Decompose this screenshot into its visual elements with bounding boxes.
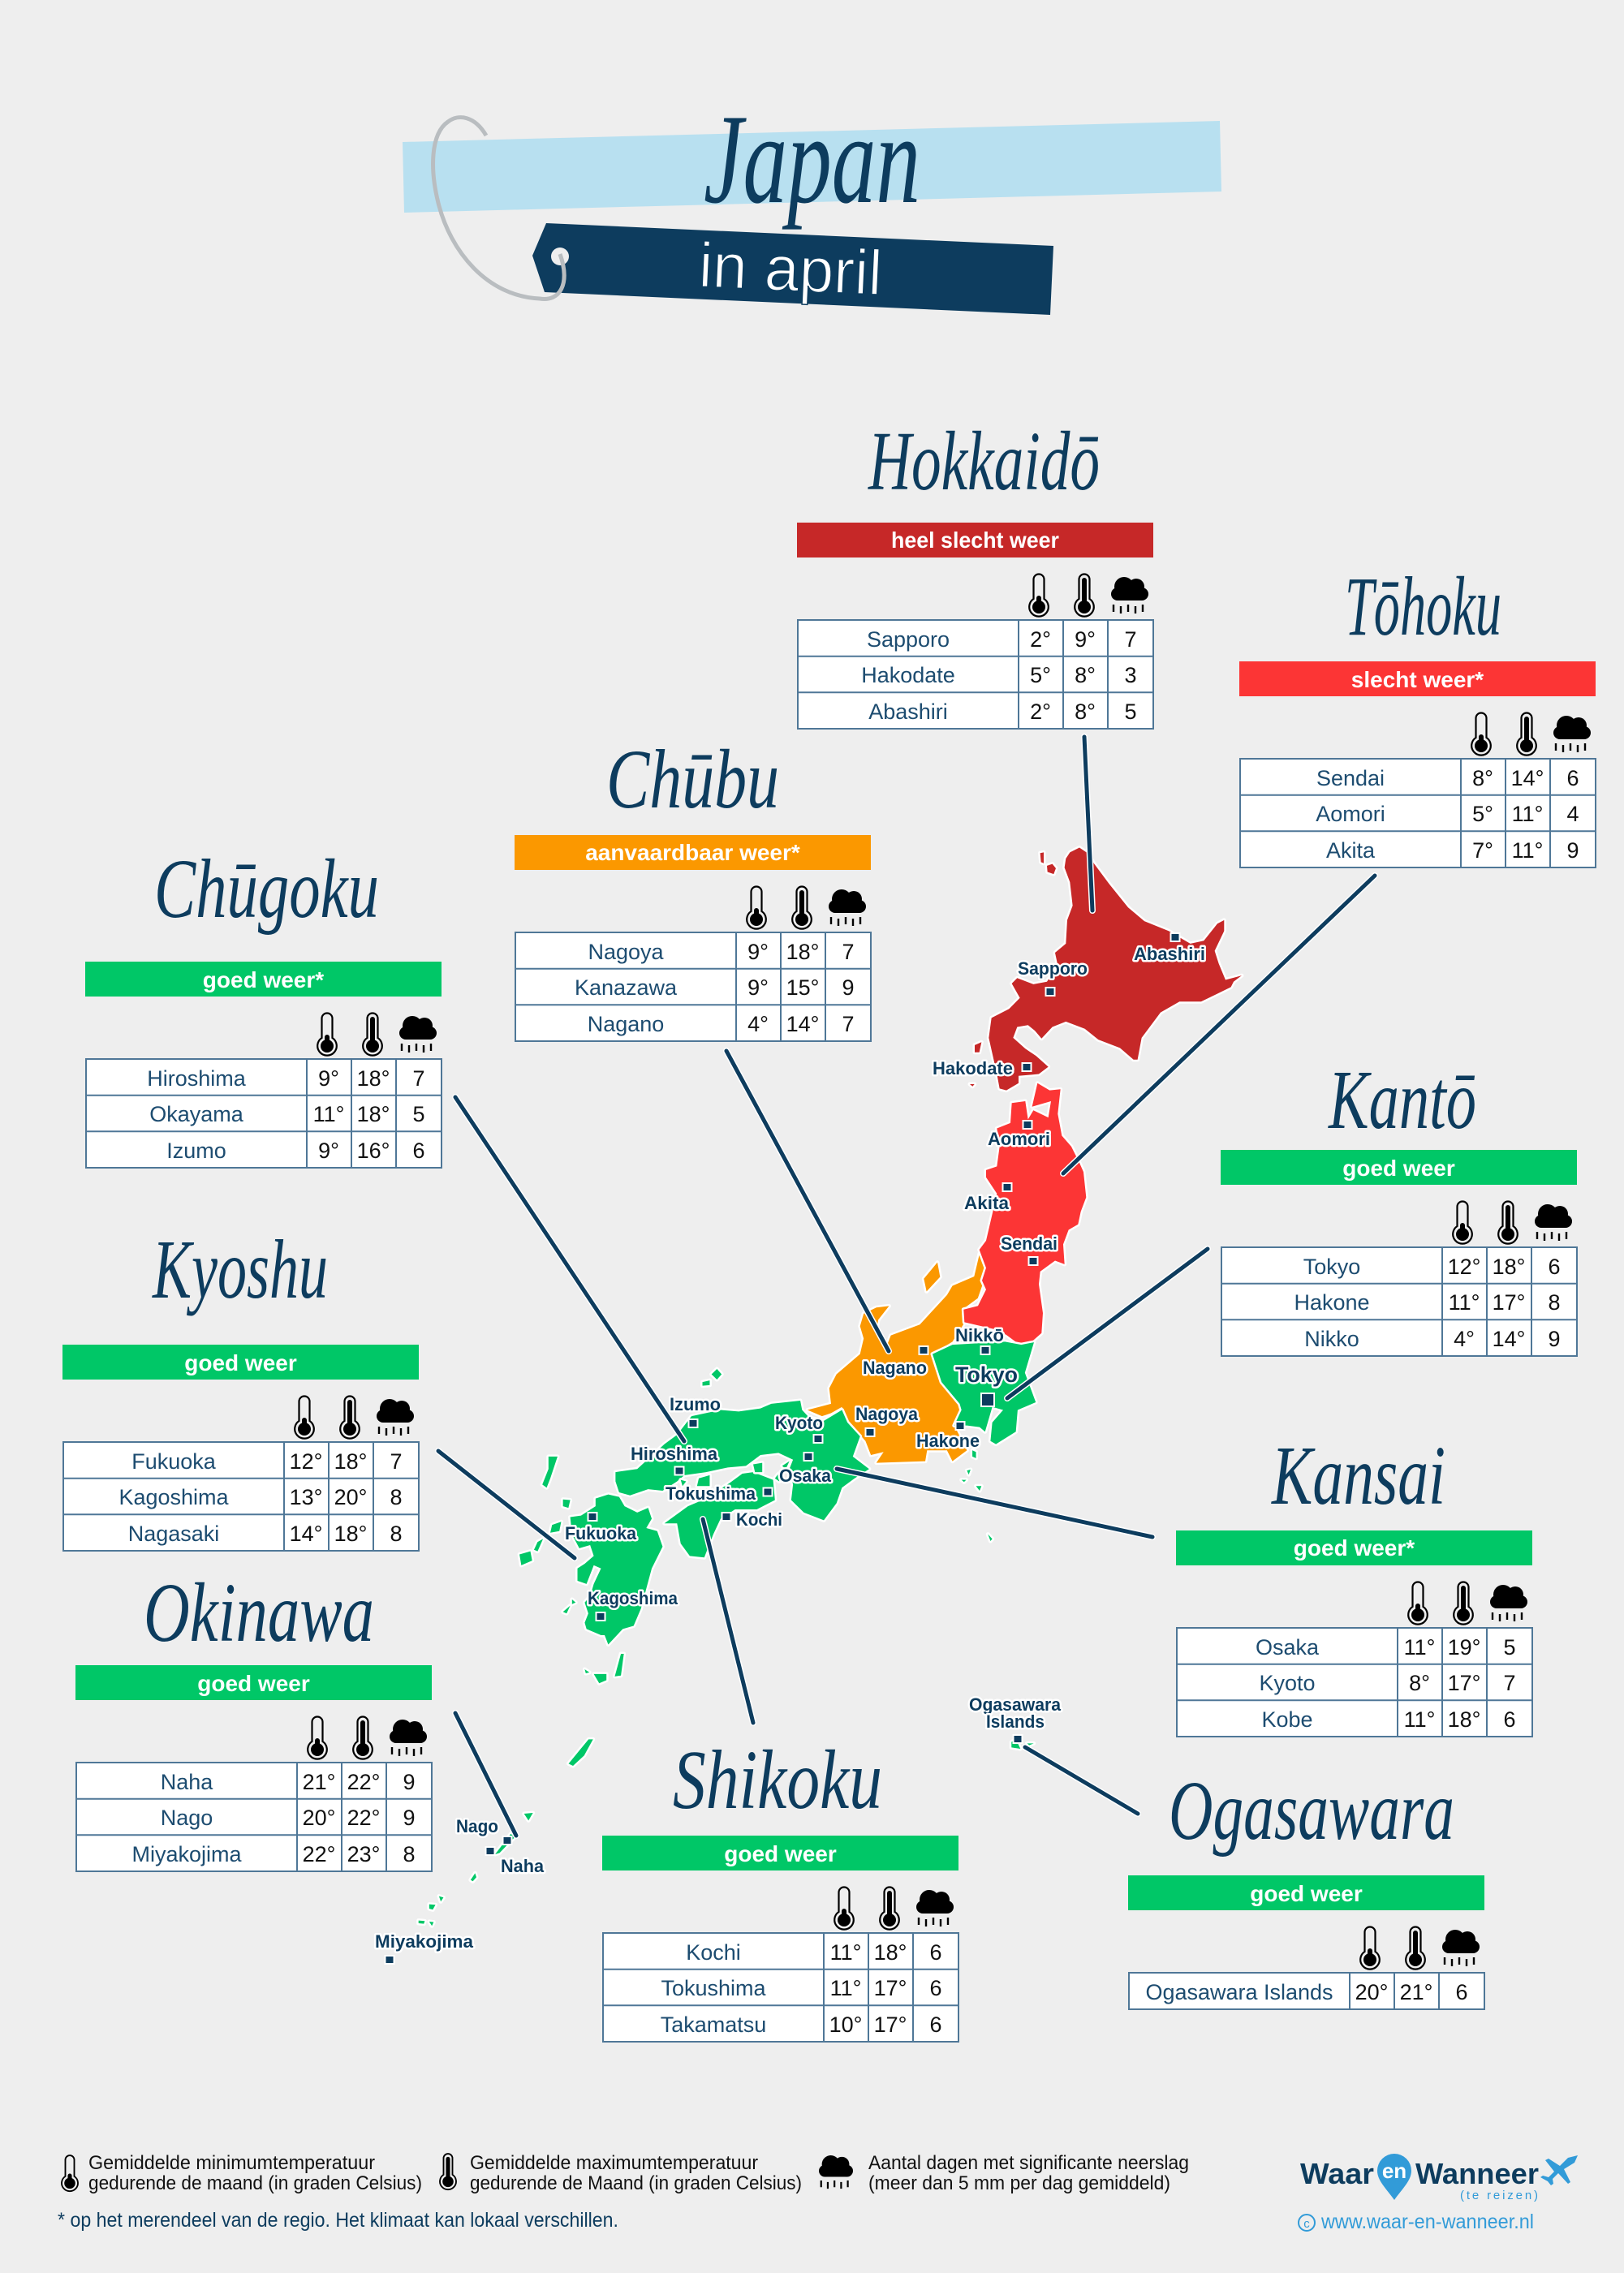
- icon: maximum temperature: [1454, 1582, 1473, 1625]
- table: 23°: [347, 1842, 380, 1866]
- icon: maximum temperature: [340, 1396, 360, 1439]
- table: [1177, 1628, 1532, 1737]
- table: 9°: [318, 1139, 339, 1163]
- city labels: Fukuoka: [565, 1523, 637, 1543]
- website: www.waar-en-wanneer.nl: [1320, 2211, 1534, 2233]
- table: Hakodate: [861, 663, 955, 687]
- table: 6: [1455, 1980, 1468, 2004]
- city labels: Kochi: [736, 1509, 782, 1530]
- rating bar: goed weer*: [203, 967, 324, 992]
- icon: legend minimum temperature: [62, 2155, 78, 2191]
- table: 17°: [874, 2013, 907, 2037]
- table: 17°: [1493, 1290, 1525, 1315]
- table: 18°: [334, 1522, 367, 1546]
- table: [1240, 759, 1596, 867]
- table: 8°: [1075, 700, 1096, 724]
- city labels: Hiroshima: [631, 1444, 718, 1464]
- rating bar: slecht weer*: [1351, 667, 1484, 692]
- table: 7: [390, 1449, 403, 1474]
- rating bar: [602, 1836, 958, 1870]
- table: 9°: [747, 975, 769, 1000]
- table: [63, 1442, 419, 1551]
- icon: maximum temperature: [1075, 575, 1094, 617]
- table: 8: [1548, 1290, 1561, 1315]
- city labels: [375, 944, 1205, 1952]
- table: 7: [412, 1066, 425, 1091]
- title tag: [532, 223, 1053, 315]
- table: 6: [929, 1940, 942, 1965]
- table: Tokushima: [661, 1976, 767, 2000]
- table: 17°: [874, 1976, 907, 2000]
- icon: rain: [829, 889, 866, 926]
- table: 15°: [786, 975, 819, 1000]
- region map: Hokkaido: [970, 848, 1242, 1091]
- table: 18°: [357, 1066, 390, 1091]
- rating bar: heel slecht weer: [891, 527, 1059, 553]
- title ribbon: [403, 121, 1221, 213]
- city labels: Izumo: [670, 1394, 721, 1414]
- leader: Kanto: [1007, 1249, 1208, 1398]
- table: 8°: [1075, 663, 1096, 687]
- panel: Kansai: [1176, 1429, 1532, 1737]
- icon: maximum temperature: [363, 1013, 382, 1056]
- table: 9°: [318, 1066, 339, 1091]
- heading: Hokkaido: Hokkaidō: [868, 415, 1100, 508]
- table: 18°: [1448, 1707, 1480, 1732]
- table: Okayama: [149, 1102, 244, 1126]
- table: Nago: [161, 1806, 213, 1830]
- icon: rain: [916, 1890, 954, 1926]
- icon: minimum temperature: [834, 1888, 854, 1930]
- city labels: Kagoshima: [588, 1588, 678, 1608]
- city labels: Hakone: [916, 1431, 980, 1451]
- rating bar: goed weer: [197, 1671, 310, 1696]
- table: [76, 1763, 432, 1871]
- city labels: Nagano: [863, 1358, 927, 1378]
- icon: minimum temperature: [317, 1013, 337, 1056]
- city labels: Islands: [986, 1711, 1045, 1732]
- table: 4°: [747, 1012, 769, 1036]
- table: 4: [1566, 802, 1579, 826]
- subtitle: in april: in april: [697, 229, 884, 308]
- city labels: Miyakojima: [375, 1931, 474, 1952]
- table: Kyoto: [1259, 1671, 1316, 1695]
- icon: rain: [377, 1399, 414, 1436]
- table: Izumo: [166, 1139, 226, 1163]
- icon: maximum temperature: [353, 1717, 373, 1759]
- table: Fukuoka: [131, 1449, 217, 1474]
- table: 9: [403, 1806, 416, 1830]
- table: Abashiri: [868, 700, 948, 724]
- table: 5°: [1472, 802, 1493, 826]
- table: 6: [412, 1139, 425, 1163]
- leader: Tohoku: [1063, 876, 1375, 1173]
- table: 14°: [786, 1012, 819, 1036]
- city labels: Tokushima: [666, 1483, 756, 1504]
- panel: Okinawa: [75, 1566, 432, 1871]
- city labels: Sapporo: [1018, 958, 1088, 979]
- rating bar: [515, 835, 871, 870]
- table: Kochi: [686, 1940, 741, 1965]
- table: Kobe: [1261, 1707, 1313, 1732]
- table: 11°: [830, 1976, 861, 2000]
- panel: Chugoku: [85, 842, 442, 1168]
- icon: maximum temperature: [792, 886, 812, 929]
- tag hole: [551, 248, 569, 265]
- legend text: rain: [868, 2152, 1189, 2194]
- table: 16°: [357, 1139, 390, 1163]
- table: 4°: [1454, 1327, 1475, 1351]
- leader: Kyushu: [438, 1451, 575, 1558]
- table: [798, 620, 1153, 729]
- city labels: Osaka: [779, 1466, 832, 1486]
- city labels: Aomori: [988, 1129, 1050, 1149]
- leader: Okinawa: [455, 1713, 516, 1836]
- icon: rain: [390, 1720, 427, 1756]
- icon: rain: [1490, 1585, 1527, 1621]
- table: 8°: [1472, 766, 1493, 790]
- table: 8°: [1409, 1671, 1430, 1695]
- table: Hiroshima: [147, 1066, 247, 1091]
- panel: Shikoku: [602, 1733, 958, 2042]
- leader: Chugoku: [455, 1097, 684, 1441]
- table: 9: [403, 1770, 416, 1794]
- icon: rain: [1111, 577, 1148, 613]
- rating bar: [85, 962, 442, 997]
- table: 14°: [290, 1522, 322, 1546]
- icon: rain: [1442, 1930, 1480, 1966]
- city labels: Nago: [456, 1816, 498, 1836]
- table: [515, 932, 871, 1041]
- icon: minimum temperature: [1471, 712, 1491, 756]
- icon: minimum temperature: [1408, 1582, 1428, 1625]
- city labels: Ogasawara: [969, 1694, 1062, 1715]
- city labels: Kyoto: [775, 1413, 823, 1433]
- table: 18°: [1493, 1255, 1525, 1279]
- logo: Waar en Wanneer: [1299, 2154, 1578, 2233]
- icon: minimum temperature: [308, 1717, 327, 1759]
- table: Hakone: [1294, 1290, 1370, 1315]
- region map: Tohoku: [963, 1083, 1086, 1344]
- table: 11°: [1512, 838, 1543, 863]
- leader lines: [438, 737, 1375, 1836]
- table: 11°: [1512, 802, 1543, 826]
- table: Aomori: [1316, 802, 1385, 826]
- table: Tokyo: [1303, 1255, 1360, 1279]
- leader: Kansai: [837, 1469, 1152, 1537]
- table: 9: [842, 975, 855, 1000]
- logo pin text: en: [1382, 2159, 1406, 2183]
- rating bar: [1128, 1875, 1484, 1910]
- icon: legend maximum temperature: [440, 2154, 456, 2189]
- icon: minimum temperature: [1360, 1926, 1380, 1970]
- heading: Kansai: Kansai: [1271, 1429, 1445, 1522]
- legend text: rain: Aantal dagen met significante neerslag: [868, 2152, 1189, 2174]
- table: Kagoshima: [118, 1485, 230, 1509]
- table: 5: [1124, 700, 1137, 724]
- table: 21°: [303, 1770, 335, 1794]
- icon: rain: [1535, 1204, 1572, 1241]
- rating bar: goed weer: [1342, 1156, 1455, 1181]
- icon: maximum temperature: [1517, 712, 1536, 756]
- table: Osaka: [1256, 1635, 1320, 1660]
- table: 8: [390, 1522, 403, 1546]
- table: Nagasaki: [128, 1522, 219, 1546]
- heading: Ogasawara: Ogasawara: [1169, 1764, 1454, 1858]
- table: 7: [1503, 1671, 1516, 1695]
- rating bar: goed weer*: [1294, 1535, 1415, 1561]
- table: 11°: [1404, 1635, 1435, 1660]
- icon: minimum temperature: [747, 886, 766, 929]
- table: 5: [412, 1102, 425, 1126]
- table: Takamatsu: [661, 2013, 766, 2037]
- rating bar: [797, 523, 1153, 557]
- table: Kanazawa: [575, 975, 678, 1000]
- region map: Kanto, Kansai, Chugoku, Shikoku and Kyushu: [519, 1341, 1036, 1683]
- table: 6: [929, 2013, 942, 2037]
- copyright mark: [1299, 2215, 1315, 2231]
- logo subtitle: (te reizen): [1460, 2189, 1538, 2202]
- city labels: Abashiri: [1134, 944, 1205, 964]
- table: 22°: [347, 1770, 380, 1794]
- table: 22°: [347, 1806, 380, 1830]
- table: 18°: [334, 1449, 367, 1474]
- table: Sapporo: [867, 627, 950, 652]
- city markers: [385, 933, 1180, 1964]
- table: Naha: [161, 1770, 213, 1794]
- table: 18°: [357, 1102, 390, 1126]
- rating bar: [1221, 1150, 1577, 1185]
- table: 2°: [1030, 627, 1051, 652]
- heading: Chugoku: Chūgoku: [154, 842, 379, 936]
- panel: Hokkaido: [797, 415, 1153, 729]
- table: Ogasawara Islands: [1145, 1980, 1333, 2004]
- tag string: [433, 118, 564, 299]
- legend text: minimum temperature: gedurende de maand (in graden Celsius): [88, 2172, 422, 2194]
- table: 17°: [1448, 1671, 1480, 1695]
- table: 9: [1566, 838, 1579, 863]
- table: [86, 1059, 442, 1168]
- table: 11°: [313, 1102, 344, 1126]
- table: Akita: [1326, 838, 1376, 863]
- heading: Okinawa: Okinawa: [144, 1566, 374, 1660]
- rating bar: goed weer: [184, 1350, 297, 1375]
- title: Japan: Japan: [704, 88, 920, 230]
- legend text: minimum temperature: Gemiddelde minimumtemperatuur: [88, 2152, 375, 2174]
- city labels: Nagoya: [855, 1404, 919, 1424]
- table: 6: [1503, 1707, 1516, 1732]
- heading: Kanto: Kantō: [1328, 1053, 1476, 1147]
- panel: Kanto: [1221, 1053, 1577, 1356]
- logo text: Waar: Waar: [1300, 2157, 1374, 2190]
- table: 9°: [1075, 627, 1096, 652]
- table: Nagano: [588, 1012, 664, 1036]
- table: 12°: [1448, 1255, 1480, 1279]
- table: 6: [929, 1976, 942, 2000]
- city labels: Nikkō: [955, 1325, 1004, 1345]
- heading: Kyushu: Kyoshu: [152, 1223, 328, 1316]
- table: 8: [403, 1842, 416, 1866]
- icon: maximum temperature: [1498, 1201, 1518, 1244]
- leader: Shikoku: [703, 1519, 753, 1723]
- icon: maximum temperature: [1406, 1926, 1425, 1970]
- rating bar: [62, 1345, 419, 1380]
- table: 18°: [786, 940, 819, 964]
- legend text: maximum temperature: gedurende de Maand (in graden Celsius): [470, 2172, 802, 2194]
- table: [1129, 1973, 1484, 2009]
- rating bar: goed weer: [1250, 1881, 1363, 1906]
- table: 14°: [1493, 1327, 1525, 1351]
- map of Japan: [419, 848, 1242, 1926]
- icon: rain: [1553, 716, 1591, 752]
- table: 3: [1124, 663, 1137, 687]
- table: 20°: [334, 1485, 367, 1509]
- icon: maximum temperature: [880, 1888, 899, 1930]
- title block: [403, 88, 1221, 315]
- panel: Kyushu: [62, 1223, 419, 1551]
- table: 2°: [1030, 700, 1051, 724]
- table: 9°: [747, 940, 769, 964]
- table: 18°: [874, 1940, 907, 1965]
- table: 11°: [1404, 1707, 1435, 1732]
- table: 7°: [1472, 838, 1493, 863]
- logo text: Wanneer: Wanneer: [1415, 2157, 1539, 2190]
- table: 20°: [303, 1806, 335, 1830]
- icon: plane: [1540, 2155, 1578, 2185]
- table: Nagoya: [588, 940, 665, 964]
- table: Sendai: [1316, 766, 1385, 790]
- panel: Chubu: [515, 733, 871, 1041]
- table: 14°: [1511, 766, 1544, 790]
- leader: Hokkaido: [1084, 737, 1092, 910]
- rating bar: [75, 1665, 432, 1700]
- footnote: * op het merendeel van de regio. Het klimaat kan lokaal verschillen.: [58, 2209, 618, 2232]
- table: [1221, 1247, 1577, 1356]
- heading: Chubu: Chūbu: [606, 733, 779, 826]
- table: 13°: [290, 1485, 322, 1509]
- leader: Chubu: [726, 1051, 889, 1351]
- table: 9: [1548, 1327, 1561, 1351]
- table: 11°: [1449, 1290, 1480, 1315]
- rating bar: [1239, 661, 1596, 696]
- heading: Shikoku: Shikoku: [673, 1733, 882, 1827]
- table: 21°: [1400, 1980, 1432, 2004]
- table: 6: [1548, 1255, 1561, 1279]
- table: 7: [842, 940, 855, 964]
- table: 22°: [303, 1842, 335, 1866]
- legend text: maximum temperature: Gemiddelde maximumtemperatuur: [470, 2152, 758, 2174]
- table: 8: [390, 1485, 403, 1509]
- table: 10°: [829, 2013, 862, 2037]
- city labels: Sendai: [1001, 1233, 1058, 1254]
- table: 7: [1124, 627, 1137, 652]
- heading: Tohoku: Tōhoku: [1345, 560, 1501, 653]
- leader: Ogasawara: [1025, 1747, 1138, 1814]
- table: 12°: [290, 1449, 322, 1474]
- rating bar: [1176, 1530, 1532, 1565]
- legend text: maximum temperature: [470, 2152, 802, 2194]
- table: [603, 1933, 958, 2042]
- icon: minimum temperature: [1453, 1201, 1472, 1244]
- legend text: minimum temperature: [88, 2152, 422, 2194]
- table: 7: [842, 1012, 855, 1036]
- city labels: Akita: [964, 1193, 1010, 1213]
- rating bar: goed weer: [724, 1841, 837, 1866]
- city labels: Naha: [501, 1856, 545, 1876]
- table: 20°: [1355, 1980, 1388, 2004]
- table: 11°: [830, 1940, 861, 1965]
- logo pin: [1377, 2154, 1411, 2200]
- copyright c: c: [1303, 2217, 1310, 2231]
- table: Nikko: [1304, 1327, 1359, 1351]
- rating bar: aanvaardbaar weer*: [585, 840, 800, 865]
- table: 5: [1503, 1635, 1516, 1660]
- table: Miyakojima: [131, 1842, 242, 1866]
- region map: Chubu: [808, 1254, 997, 1463]
- table: 5°: [1030, 663, 1051, 687]
- legend text: rain: (meer dan 5 mm per dag gemiddeld): [868, 2172, 1170, 2194]
- panel: Tohoku: [1239, 560, 1596, 867]
- city labels: Tokyo: [955, 1363, 1018, 1387]
- icon: rain: [399, 1016, 437, 1053]
- city labels: Hakodate: [933, 1058, 1013, 1078]
- table: 19°: [1448, 1635, 1480, 1660]
- icon: minimum temperature: [295, 1396, 314, 1439]
- legend: [62, 2152, 1189, 2194]
- panel: Ogasawara: [1128, 1764, 1484, 2009]
- table: 6: [1566, 766, 1579, 790]
- icon: legend rain: [819, 2155, 853, 2189]
- region map: Okinawa and Ogasawara islands: [419, 1739, 1034, 1926]
- icon: minimum temperature: [1029, 575, 1049, 617]
